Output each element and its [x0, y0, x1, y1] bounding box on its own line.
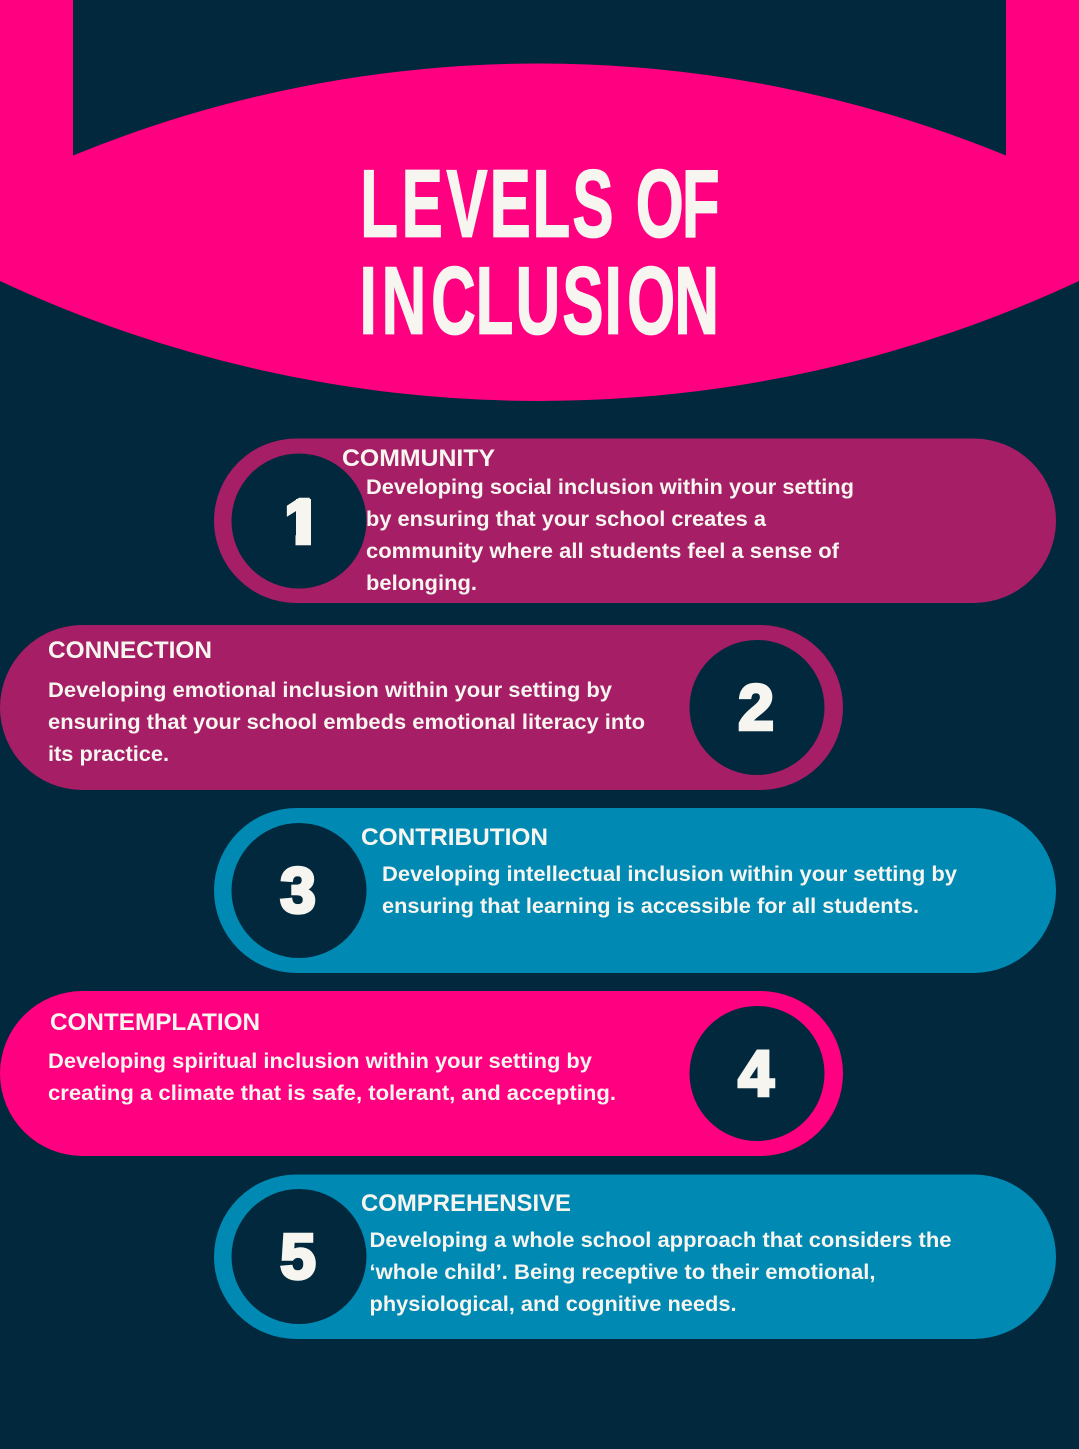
panel: level 2 connection — [0, 625, 843, 790]
text: contribution description: Developing intellectual inclusion within your setting by — [382, 862, 957, 886]
icon: number 2 badge — [690, 640, 824, 775]
icon: number 3 badge: 3 — [280, 854, 316, 926]
panel: level 3 contribution — [214, 808, 1056, 973]
text: comprehensive description: physiological, and cognitive needs. — [370, 1292, 736, 1316]
heading: contemplation: CONTEMPLATION — [50, 1009, 260, 1036]
text: connection description: ensuring that your school embeds emotional literacy into — [48, 710, 645, 734]
title: INCLUSION — [360, 248, 719, 355]
text: comprehensive description: Developing a whole school approach that considers the — [370, 1228, 952, 1252]
text: comprehensive description: ‘whole child’. Being receptive to their emotional, — [370, 1260, 876, 1284]
text: contemplation description: creating a climate that is safe, tolerant, and accepting. — [48, 1081, 616, 1105]
heading: comprehensive: COMPREHENSIVE — [361, 1190, 571, 1217]
heading: connection: CONNECTION — [48, 637, 212, 664]
text: contemplation description: Developing spiritual inclusion within your setting by — [48, 1049, 592, 1073]
text: contemplation description — [48, 1049, 616, 1105]
icon: number 4 badge — [690, 1006, 824, 1141]
text: connection description — [48, 678, 645, 766]
text: contribution description: ensuring that learning is accessible for all students. — [382, 894, 919, 918]
icon: number 1 badge — [232, 454, 366, 588]
heading: contribution: CONTRIBUTION — [361, 824, 548, 851]
text: community description — [366, 475, 854, 595]
icon: number 3 badge — [232, 823, 366, 958]
icon: number 2 badge: 2 — [738, 672, 774, 744]
text: contribution description — [382, 862, 957, 918]
icon: number 5 badge — [232, 1189, 366, 1324]
icon: number 1 badge: 1 — [284, 486, 320, 558]
panel: level 1 community — [214, 438, 1056, 603]
panel: level 5 comprehensive — [214, 1174, 1056, 1339]
heading: community: COMMUNITY — [342, 445, 495, 472]
panel: level 4 contemplation — [0, 991, 843, 1156]
banner: pink ribbon header — [0, 0, 1079, 401]
title — [360, 151, 720, 355]
icon: number 5 badge: 5 — [280, 1220, 316, 1292]
icon: number 4 badge: 4 — [738, 1038, 774, 1110]
text: community description: community where all students feel a sense of — [366, 539, 840, 563]
text: connection description: its practice. — [48, 742, 169, 766]
text: community description: by ensuring that your school creates a — [366, 507, 767, 531]
text: connection description: Developing emotional inclusion within your setting by — [48, 678, 612, 702]
text: community description: belonging. — [366, 571, 477, 595]
title: LEVELS OF — [360, 151, 720, 258]
text: community description: Developing social inclusion within your setting — [366, 475, 854, 499]
text: comprehensive description — [370, 1228, 952, 1316]
